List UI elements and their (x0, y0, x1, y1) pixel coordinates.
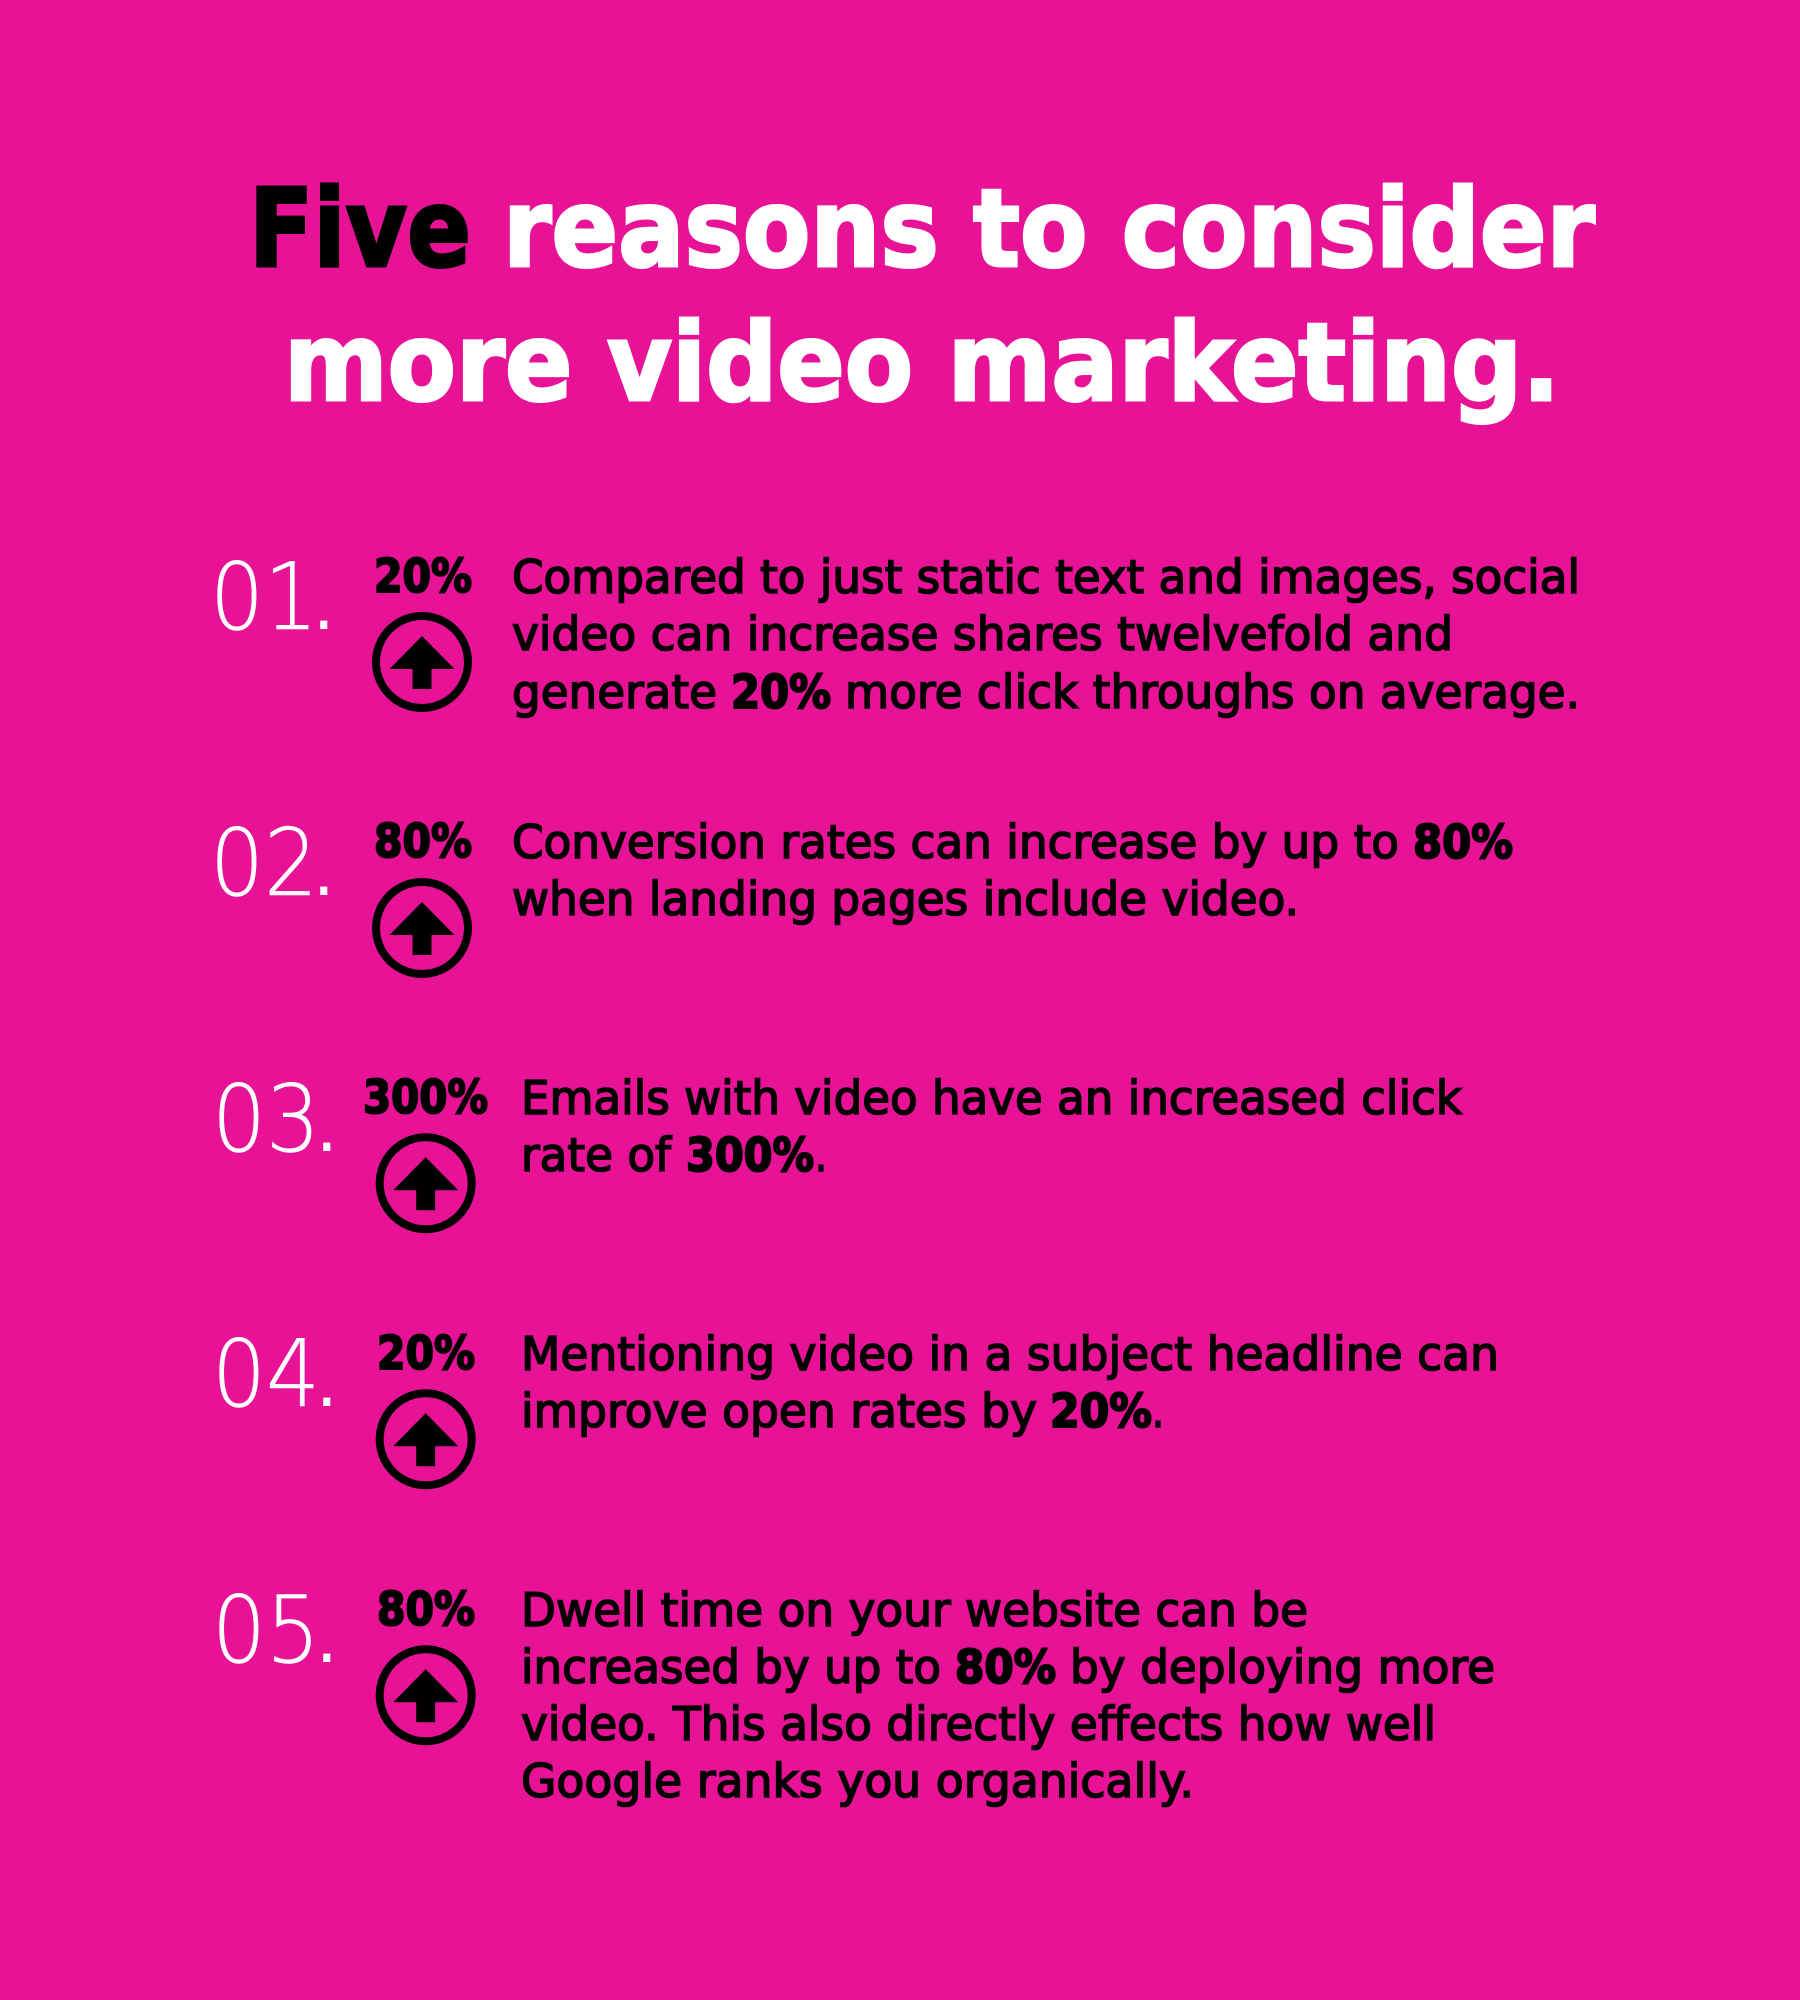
body text: video can increase shares twelvefold and (512, 607, 1453, 661)
title (249, 167, 1595, 426)
stat 20%: 20% (377, 1326, 475, 1380)
number 02: 02 (210, 809, 318, 917)
body text: generate (512, 665, 717, 719)
stat 80%: 80% (374, 814, 472, 868)
body text: 80% (1413, 815, 1513, 869)
icon: up arrow in circle (376, 616, 468, 708)
body text: Mentioning video in a subject headline can (521, 1327, 1499, 1381)
body text (512, 550, 1580, 719)
icon: up arrow in circle (380, 1649, 472, 1741)
number 03: 03 (212, 1065, 320, 1173)
body text (521, 1071, 1462, 1182)
body text: increased by up to (521, 1640, 941, 1694)
number 01: 01 (210, 543, 318, 651)
panel: reason 01 (210, 543, 1580, 719)
body text: . (1152, 1384, 1164, 1438)
panel: reason 05 (212, 1576, 1495, 1808)
icon: up arrow in circle (380, 1393, 472, 1485)
number 01: . (313, 567, 335, 646)
body text: more click throughs on average. (845, 665, 1580, 719)
body text: Compared to just static text and images, social (512, 550, 1580, 604)
body text: Conversion rates can increase by up to (512, 815, 1399, 869)
body text: improve open rates by (521, 1384, 1037, 1438)
body text: 20% (731, 665, 831, 719)
number 03: . (316, 1089, 338, 1168)
body text (521, 1583, 1495, 1808)
stat 20%: 20% (374, 549, 472, 603)
body text: video. This also directly effects how well (521, 1697, 1436, 1751)
number 05: 05 (212, 1576, 320, 1684)
title: Five (249, 167, 471, 292)
panel: reason 02 (210, 809, 1513, 974)
stat 300%: 300% (363, 1070, 488, 1124)
icon: up arrow in circle (380, 1137, 472, 1229)
body text: Dwell time on your website can be (521, 1583, 1308, 1637)
number 05: . (316, 1600, 338, 1679)
body text: rate of (521, 1128, 673, 1182)
number 04: 04 (212, 1320, 320, 1428)
body text (521, 1327, 1499, 1438)
number 04: . (316, 1344, 338, 1423)
body text: by deploying more (1070, 1640, 1495, 1694)
panel: reason 03 (212, 1065, 1462, 1229)
body text (512, 815, 1513, 926)
title: more video marketing. (284, 301, 1560, 426)
title: reasons to consider (503, 167, 1595, 292)
body text: 80% (955, 1640, 1056, 1694)
body text: Google ranks you organically. (521, 1754, 1194, 1808)
body text: 300% (686, 1128, 814, 1182)
body text: when landing pages include video. (512, 872, 1299, 926)
stat 80%: 80% (377, 1582, 475, 1636)
panel: reason 04 (212, 1320, 1499, 1485)
icon: up arrow in circle (376, 882, 468, 974)
number 02: . (313, 833, 335, 912)
body text: Emails with video have an increased click (521, 1071, 1462, 1125)
body text: . (815, 1128, 827, 1182)
body text: 20% (1050, 1384, 1152, 1438)
